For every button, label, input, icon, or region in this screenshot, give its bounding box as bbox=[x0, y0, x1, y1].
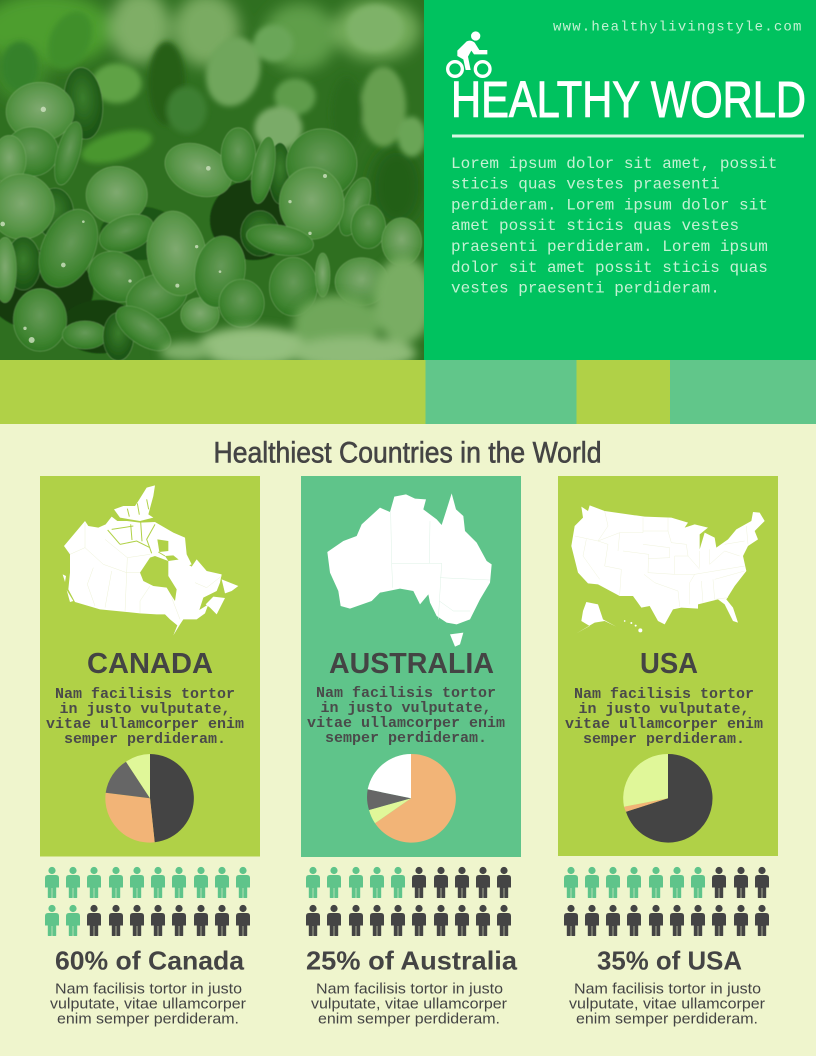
intro paragraph: amet possit sticis quas vestes bbox=[451, 217, 739, 235]
country description: in justo vulputate, bbox=[60, 701, 231, 718]
pie chart: canada bbox=[105, 754, 194, 843]
icon: cyclist bbox=[446, 31, 492, 78]
intro paragraph: praesenti perdideram. Lorem ipsum bbox=[451, 238, 768, 256]
stat description: australia: enim semper perdideram. bbox=[318, 1010, 500, 1028]
map: canada bbox=[62, 485, 238, 635]
country description: vitae ullamcorper enim bbox=[565, 716, 763, 733]
intro paragraph: perdideram. Lorem ipsum dolor sit bbox=[451, 196, 768, 214]
shadows bbox=[0, 250, 93, 330]
country description: Nam facilisis tortor bbox=[316, 685, 496, 702]
section heading: Healthiest Countries in the World bbox=[214, 436, 602, 470]
pictogram: canada 60% bbox=[45, 867, 250, 936]
stat description: usa: vulputate, vitae ullamcorper bbox=[569, 996, 765, 1012]
country description: semper perdideram. bbox=[583, 731, 745, 748]
panel: usa bbox=[558, 476, 778, 856]
intro paragraph: sticis quas vestes praesenti bbox=[451, 176, 720, 194]
country name: CANADA bbox=[87, 648, 213, 680]
stat description: usa: enim semper perdideram. bbox=[576, 1010, 758, 1028]
stat description: canada: Nam facilisis tortor in justo bbox=[55, 980, 242, 998]
stat: australia bbox=[306, 946, 518, 1028]
website url: www.healthylivingstyle.com bbox=[553, 20, 803, 36]
stat: usa: 35% of USA bbox=[597, 946, 742, 976]
country description: semper perdideram. bbox=[64, 731, 226, 748]
map: australia bbox=[327, 494, 492, 647]
stat description: australia: Nam facilisis tortor in justo bbox=[316, 980, 503, 998]
colour strip bbox=[0, 360, 816, 424]
pictogram: australia 25% bbox=[306, 867, 511, 936]
pictogram: usa 35% bbox=[564, 867, 769, 936]
country description: semper perdideram. bbox=[325, 730, 487, 747]
country description: Nam facilisis tortor bbox=[55, 686, 235, 703]
intro paragraph: vestes praesenti perdideram. bbox=[451, 279, 720, 297]
pie chart: usa bbox=[623, 754, 713, 843]
intro paragraph: Lorem ipsum dolor sit amet, possit bbox=[451, 155, 777, 173]
title rule bbox=[452, 134, 804, 138]
country description: in justo vulputate, bbox=[578, 701, 750, 718]
country name: AUSTRALIA bbox=[329, 648, 494, 680]
Hudson Bay and inland water bbox=[140, 556, 177, 601]
country description: Nam facilisis tortor bbox=[574, 686, 754, 703]
stat: canada bbox=[50, 946, 250, 1028]
photo: green leaves with water drops bbox=[0, 0, 424, 360]
stat description: usa: Nam facilisis tortor in justo bbox=[574, 980, 761, 998]
panel: canada bbox=[40, 476, 260, 856]
stat description: canada: vulputate, vitae ullamcorper bbox=[50, 996, 246, 1012]
stat: canada: 60% of Canada bbox=[55, 946, 245, 976]
country description: in justo vulputate, bbox=[320, 700, 492, 717]
stat description: canada: enim semper perdideram. bbox=[57, 1010, 239, 1028]
stat: australia: 25% of Australia bbox=[306, 946, 518, 976]
stat: usa bbox=[569, 946, 769, 1028]
country description: vitae ullamcorper enim bbox=[46, 716, 244, 733]
panel: australia bbox=[301, 476, 521, 857]
map: usa bbox=[571, 505, 765, 633]
stat description: australia: vulputate, vitae ullamcorper bbox=[311, 996, 507, 1012]
header panel bbox=[424, 0, 816, 360]
intro paragraph: dolor sit amet possit sticis quas bbox=[451, 259, 768, 277]
pie chart: australia bbox=[367, 754, 456, 843]
country name: USA bbox=[640, 648, 698, 680]
country description: vitae ullamcorper enim bbox=[307, 715, 505, 732]
